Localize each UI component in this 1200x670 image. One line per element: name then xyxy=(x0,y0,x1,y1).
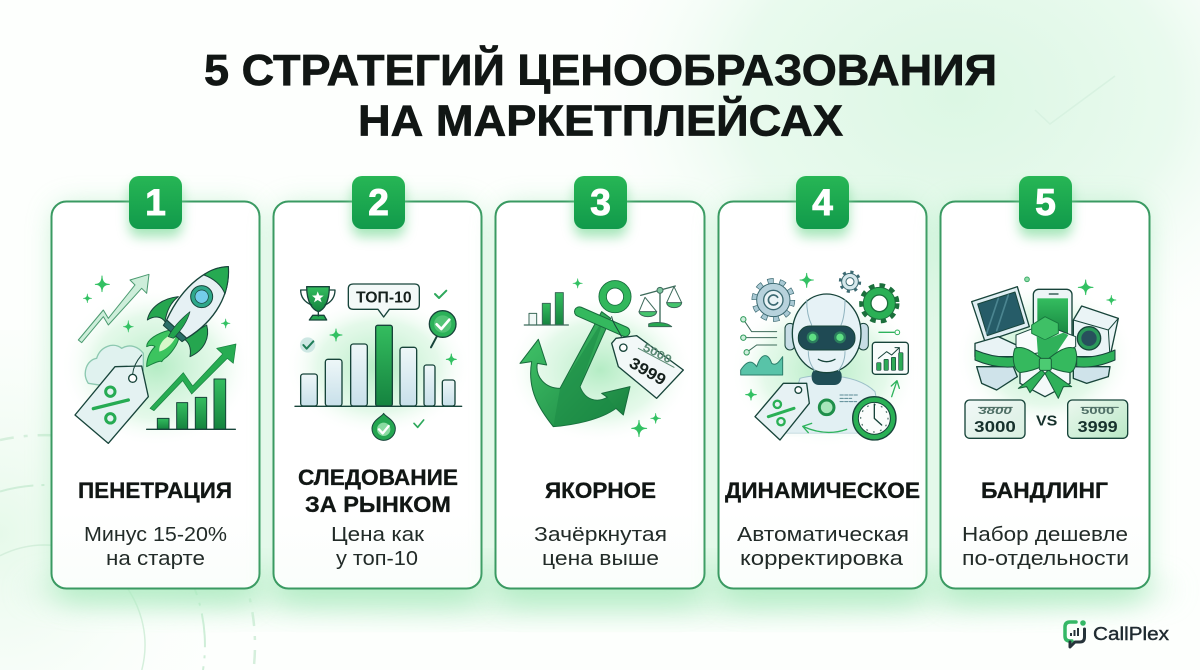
description: anchor: цена выше xyxy=(542,547,659,570)
icon: rocket with price tag xyxy=(60,267,253,447)
heading: bundling: БАНДЛИНГ xyxy=(981,478,1109,503)
icon: anchor with price tag: 5000 xyxy=(641,342,673,366)
panel: 2 market following xyxy=(274,176,482,602)
price box right xyxy=(1068,400,1128,438)
title xyxy=(204,44,997,146)
icon: gift bundle with electronics xyxy=(955,277,1135,438)
description: penetration: Минус 15-20% xyxy=(84,523,227,546)
heading: market following: СЛЕДОВАНИЕ xyxy=(298,465,458,490)
panel: 3 anchor xyxy=(496,176,704,602)
description: bundling xyxy=(962,523,1129,570)
badge 3: 3 xyxy=(590,182,611,223)
description: bundling: Набор дешевле xyxy=(962,523,1128,546)
price box left: 3800 xyxy=(978,406,1012,417)
icon: top-10 bar chart xyxy=(285,284,472,440)
icon: anchor with price tag xyxy=(507,279,693,443)
badge 5: 5 xyxy=(1035,182,1056,223)
icon: top-10 bar chart: ТОП-10 xyxy=(356,289,412,306)
badge 2 xyxy=(352,176,405,237)
panel: 5 bundling xyxy=(940,176,1150,602)
description: dynamic xyxy=(737,523,909,570)
heading: market following xyxy=(298,465,458,517)
badge 3 xyxy=(574,176,627,237)
title: НА МАРКЕТПЛЕЙСАХ xyxy=(358,94,843,146)
badge 1 xyxy=(129,176,182,237)
heading: anchor: ЯКОРНОЕ xyxy=(545,478,656,503)
badge 4: 4 xyxy=(812,182,833,223)
heading: market following: ЗА РЫНКОМ xyxy=(305,492,451,517)
price box left: 3000 xyxy=(974,419,1016,436)
title: 5 СТРАТЕГИЙ ЦЕНООБРАЗОВАНИЯ xyxy=(204,44,997,95)
heading: penetration: ПЕНЕТРАЦИЯ xyxy=(78,478,232,503)
description: dynamic: Автоматическая xyxy=(737,523,909,546)
logo: CallPlex: CallPlex xyxy=(1093,623,1170,644)
badge 1: 1 xyxy=(145,182,166,223)
badge 2: 2 xyxy=(368,182,389,223)
panel: 1 penetration xyxy=(52,176,260,602)
description: penetration: на старте xyxy=(106,547,205,570)
description: penetration xyxy=(84,523,227,570)
heading: dynamic: ДИНАМИЧЕСКОЕ xyxy=(725,478,920,503)
panel: 4 dynamic xyxy=(718,176,926,602)
icon: robot with gears xyxy=(730,272,920,448)
icon: anchor with price tag: 3999 xyxy=(626,355,669,389)
price box left xyxy=(965,400,1025,438)
price box right: 5000 xyxy=(1081,406,1115,417)
badge 5 xyxy=(1019,176,1072,237)
description: dynamic: корректировка xyxy=(740,547,904,570)
description: market following: Цена как xyxy=(331,523,425,546)
description: bundling: по-отдельности xyxy=(962,547,1129,570)
price box right: 3999 xyxy=(1078,419,1118,436)
description: anchor xyxy=(534,523,667,570)
description: anchor: Зачёркнутая xyxy=(534,523,667,546)
logo: CallPlex xyxy=(1065,620,1170,647)
versus label: VS xyxy=(1036,413,1058,429)
badge 4 xyxy=(796,176,849,237)
description: market following: у топ-10 xyxy=(336,547,418,570)
description: market following xyxy=(331,523,425,570)
